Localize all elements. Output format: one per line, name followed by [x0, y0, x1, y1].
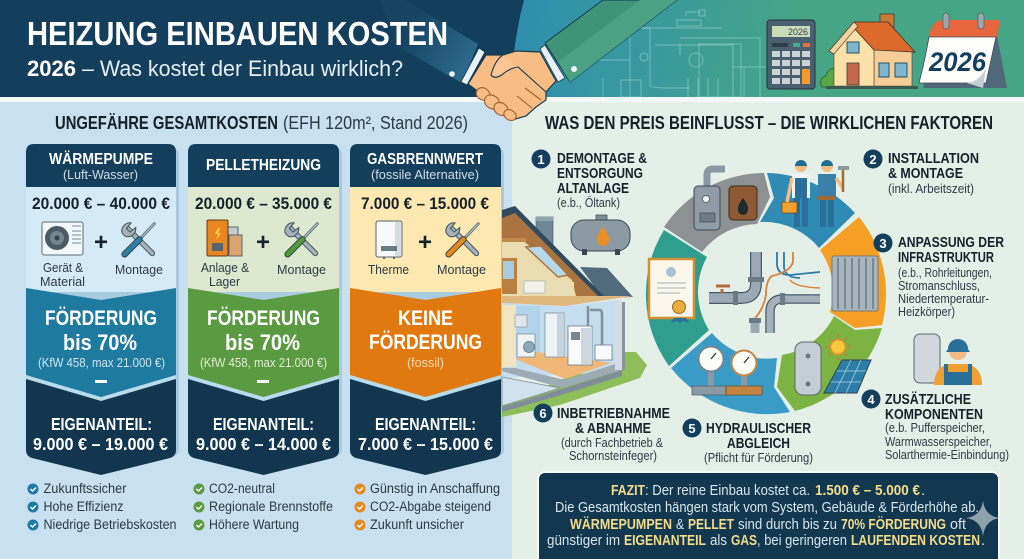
factor 1: 1	[537, 152, 545, 167]
icon: gas boiler	[376, 221, 402, 259]
callout: conclusion	[538, 472, 999, 559]
callout: conclusion: günstiger im	[547, 533, 620, 549]
factor 5: 5	[688, 421, 696, 436]
icon: calendar 2026: 2026	[928, 47, 987, 77]
factor 1: ENTSORGUNG	[557, 165, 643, 182]
callout: conclusion: FAZIT	[611, 483, 645, 499]
funding band: (KfW 458, max 21.000 €)	[200, 356, 327, 370]
card header	[26, 144, 176, 187]
attic timber	[502, 212, 602, 297]
callout: conclusion: GAS	[731, 533, 757, 549]
decorative circuit lines	[590, 10, 766, 97]
no funding band: KEINE	[398, 307, 453, 330]
factor 4: (e.b. Pufferspeicher,	[885, 420, 985, 435]
icon: tools	[122, 223, 154, 254]
price range: 20.000 € – 40.000 €	[32, 195, 170, 213]
chimney	[536, 217, 553, 247]
factor 6: 6	[539, 406, 547, 421]
funding band: FÖRDERUNG	[207, 307, 320, 330]
factor 1: DEMONTAGE &	[557, 150, 647, 167]
card header: GASBRENNWERT	[367, 151, 483, 168]
callout: conclusion: EIGENANTEIL	[624, 533, 706, 549]
callout: conclusion: PELLET	[688, 517, 734, 533]
icon: pressure gauges	[692, 346, 762, 395]
callout: conclusion: Die Gesamtkosten hängen stark vom System, Gebäude & Förderhöhe ab.	[555, 500, 979, 516]
ring diagram	[646, 173, 886, 414]
heat unit	[568, 326, 592, 365]
factor 2: 2	[869, 152, 877, 167]
no funding band	[350, 288, 501, 401]
factor 6: Schornsteinfeger)	[569, 448, 657, 463]
panel: Wärmepumpe	[26, 144, 179, 532]
label: installation: Montage	[437, 262, 486, 277]
own share	[26, 379, 176, 475]
heading: approximate total costs: UNGEFÄHRE GESAMTKOSTEN	[55, 113, 278, 133]
own share: 9.000 € – 19.000 €	[33, 434, 168, 454]
own share: 7.000 € – 15.000 €	[358, 434, 493, 454]
callout: conclusion: , bei geringeren	[757, 533, 847, 549]
price range: 20.000 € – 35.000 €	[195, 195, 332, 213]
factor 5: HYDRAULISCHER	[706, 420, 811, 437]
segment: installation	[760, 173, 855, 248]
factor 2: INSTALLATION	[888, 150, 979, 167]
factor 1: (e.b., Öltank)	[557, 195, 620, 210]
background: factors panel	[512, 102, 1024, 559]
factor 3: INFRASTRUKTUR	[898, 249, 994, 266]
own share	[188, 379, 339, 475]
callout: conclusion: oft	[950, 517, 966, 533]
factor 4: ZUSÄTZLICHE	[885, 391, 971, 408]
drawbacks list	[354, 481, 500, 532]
illustration: house cutaway	[502, 206, 647, 417]
callout: conclusion: LAUFENDEN KOSTEN	[851, 533, 980, 549]
panel: Pelletheizung	[188, 144, 342, 532]
own share	[350, 379, 501, 475]
subtitle: 2026	[27, 56, 76, 81]
basement slab	[502, 377, 560, 406]
icon: storage tank with solar panel	[795, 334, 871, 395]
ceiling slab	[502, 296, 633, 306]
factor 6	[534, 404, 670, 463]
icon: buffer tank and technician	[914, 334, 982, 385]
own share: EIGENANTEIL:	[51, 414, 152, 434]
callout: conclusion: 70% FÖRDERUNG	[841, 516, 946, 533]
icon: house	[821, 14, 918, 89]
factor 6: & ABNAHME	[575, 420, 651, 437]
factor 2: & MONTAGE	[888, 165, 963, 182]
price range: 7.000 € – 15.000 €	[361, 195, 489, 213]
drawbacks list: Zukunft unsicher	[370, 517, 464, 532]
drawbacks list: Günstig in Anschaffung	[370, 481, 500, 496]
factor 5	[682, 418, 813, 465]
label: boiler: Therme	[368, 262, 409, 277]
funding band: (KfW 458, max 21.000 €)	[38, 356, 165, 370]
factor 5: (Pflicht für Förderung)	[704, 450, 813, 465]
funding band: FÖRDERUNG	[45, 307, 157, 330]
funding band: bis 70%	[63, 330, 137, 355]
factor 3: Niedertemperatur-	[898, 291, 989, 306]
icon: outdoor unit	[42, 222, 83, 255]
no funding band: (fossil)	[407, 356, 444, 370]
benefits list: Zukunftssicher	[44, 481, 127, 496]
side roof	[580, 267, 633, 298]
callout: conclusion: sind durch bis zu	[738, 517, 837, 533]
callout: conclusion: .	[921, 483, 925, 499]
label: installation: Montage	[115, 262, 163, 277]
factor 2	[864, 150, 979, 196]
icon: certificate	[649, 259, 694, 323]
factor 1: ALTANLAGE	[557, 180, 629, 197]
fridge-like tank	[545, 313, 564, 357]
panel: Gasbrennwert	[350, 144, 504, 532]
own share: 9.000 € – 14.000 €	[196, 434, 331, 454]
card header	[350, 144, 501, 187]
own share: EIGENANTEIL:	[213, 414, 314, 434]
label: device and material	[40, 260, 85, 289]
funding band	[188, 288, 339, 401]
card header: PELLETHEIZUNG	[206, 157, 321, 174]
segment: components	[777, 316, 882, 411]
subtitle: – Was kostet der Einbau wirklich?	[82, 56, 403, 81]
benefits list: Regionale Brennstoffe	[209, 499, 333, 514]
plus: +	[94, 229, 108, 256]
icon: radiator	[832, 256, 878, 311]
benefits list	[28, 481, 176, 532]
background: cost panel	[0, 102, 512, 559]
benefits list: CO2-neutral	[209, 481, 275, 496]
callout: conclusion: als	[710, 533, 727, 549]
lawn	[502, 352, 647, 417]
icon: pellet boiler	[207, 220, 242, 256]
factor 6: INBETRIEBNAHME	[557, 405, 670, 422]
label: unit and storage	[201, 260, 249, 289]
factor 2: (inkl. Arbeitszeit)	[888, 181, 974, 196]
floor	[515, 352, 611, 379]
funding band: bis 70%	[225, 330, 300, 355]
card header: (Luft-Wasser)	[63, 167, 138, 182]
funding band	[26, 288, 176, 401]
factor 3: Heizkörper)	[898, 304, 955, 319]
icon: handshake	[380, 0, 677, 123]
icon: two workers	[782, 160, 849, 227]
callout: conclusion: WÄRMEPUMPEN	[570, 516, 672, 533]
factor 4: 4	[867, 392, 875, 407]
factor 3: 3	[879, 236, 887, 251]
benefits list	[194, 481, 333, 532]
no funding band: FÖRDERUNG	[369, 331, 482, 354]
card header: WÄRMEPUMPE	[49, 150, 153, 168]
label: unit and storage: Lager	[209, 274, 241, 289]
factor 1	[532, 150, 647, 210]
callout: conclusion: .	[981, 533, 985, 549]
label: unit and storage: Anlage &	[201, 260, 249, 275]
icon: sparkle	[966, 501, 1000, 536]
callout: conclusion: 1.500 € – 5.000 €	[815, 483, 920, 499]
factor 6: (durch Fachbetrieb &	[561, 435, 663, 450]
factor 3: (e.b., Rohrleitungen,	[898, 265, 992, 280]
icon: oil tank	[571, 215, 630, 255]
heading: approximate total costs	[55, 113, 468, 133]
benefits list: Höhere Wartung	[209, 517, 299, 532]
label: device and material: Gerät &	[43, 260, 83, 275]
segment: demolition	[664, 173, 770, 252]
callout: conclusion: &	[676, 517, 684, 533]
benefits list: Hohe Effizienz	[44, 499, 124, 514]
label: device and material: Material	[40, 274, 85, 289]
segment: commissioning	[646, 230, 709, 366]
icon: tools	[285, 223, 317, 254]
icon: calendar 2026	[919, 13, 1007, 88]
callout: conclusion: : Der reine Einbau kostet ca.	[645, 483, 810, 499]
card header	[188, 144, 339, 187]
drawbacks list: CO2-Abgabe steigend	[370, 499, 491, 514]
own share: EIGENANTEIL:	[375, 414, 476, 434]
icon: pipes and cables	[709, 252, 820, 333]
factor 4: Warmwasserspeicher,	[885, 434, 992, 449]
plus: +	[256, 229, 270, 256]
heading: approximate total costs: (EFH 120m², Stand 2026)	[283, 113, 468, 133]
card header: (fossile Alternative)	[371, 167, 479, 182]
icon: calculator	[767, 20, 815, 89]
washer	[517, 334, 535, 357]
plus: +	[418, 229, 432, 256]
header banner	[0, 0, 1024, 123]
factor 5: ABGLEICH	[727, 435, 790, 452]
icon: old boiler and oil drum	[694, 169, 757, 230]
label: installation: Montage	[277, 262, 326, 277]
segment: infrastructure	[820, 217, 886, 328]
factor 3	[874, 234, 1004, 319]
main roofline	[502, 206, 606, 298]
room walls	[502, 300, 618, 378]
icon: tools	[446, 223, 478, 254]
factor 3: Stromanschluss,	[898, 278, 980, 293]
title: HEIZUNG EINBAUEN KOSTEN	[27, 15, 448, 52]
factor 4	[862, 390, 1009, 462]
factor 4: KOMPONENTEN	[885, 406, 983, 423]
benefits list: Niedrige Betriebskosten	[44, 517, 176, 532]
segment: hydraulic balancing	[671, 333, 790, 414]
icon: calculator: 2026	[788, 27, 808, 37]
